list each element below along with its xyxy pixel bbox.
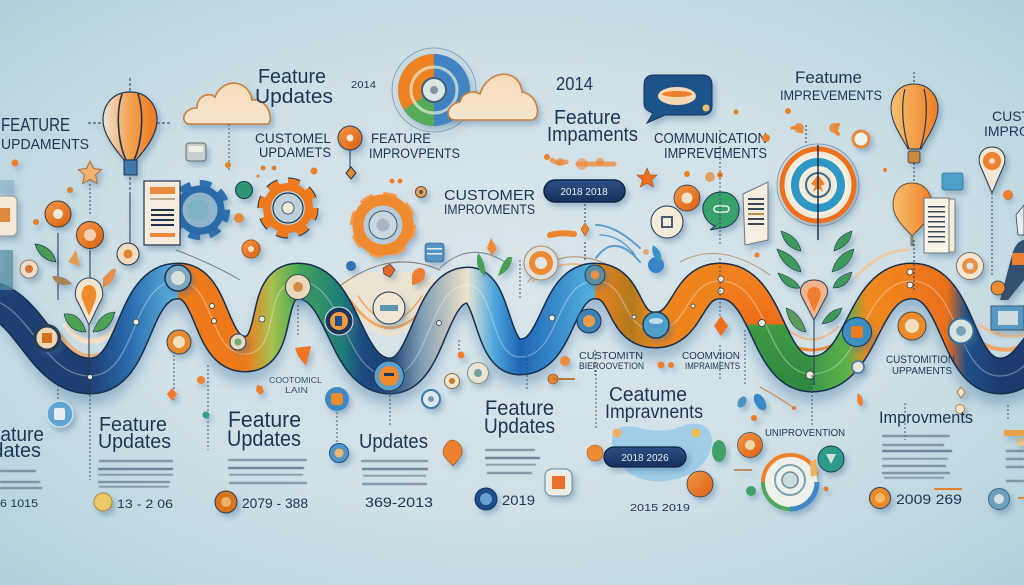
heading: feature impaments <box>547 107 638 146</box>
body text: feature updates two <box>228 459 307 484</box>
node: descending <box>948 318 974 344</box>
heading: feature updates top <box>255 66 333 108</box>
chart marker: small document device <box>186 143 206 161</box>
heading: customel updamets: CUSTOMEL <box>255 130 331 146</box>
heading: updates: Updates <box>359 431 428 453</box>
node: orange trough <box>230 334 246 350</box>
wave segment: orange peak <box>655 281 720 330</box>
timeline wave <box>0 281 1024 388</box>
target: lower <box>763 455 817 509</box>
node: peak <box>585 265 605 285</box>
balloon: right <box>891 72 938 290</box>
year marker: three: 369-2013 <box>365 494 433 510</box>
heading: ceatume impravnents: Ceatume <box>609 384 687 406</box>
heading: feature updates one <box>98 414 171 453</box>
small scatter dots top <box>225 108 1013 258</box>
caption: coomviion: COOMVIION <box>682 351 740 362</box>
heading: feature updates top: Feature <box>258 66 326 88</box>
year: far left: 6 1015 <box>0 498 38 510</box>
label: 2014 large: 2014 <box>556 74 593 94</box>
icons: central top cluster <box>234 182 512 324</box>
label: 2014 small: 2014 <box>351 80 376 91</box>
heading: feature improvpents <box>369 130 460 161</box>
wave segment: green <box>245 281 298 354</box>
icon: square badge <box>545 469 572 496</box>
caption: customition: CUSTOMITION <box>886 354 955 366</box>
pill: date label lower: 2018 2026 <box>621 453 669 464</box>
pin: orange sprout <box>786 280 842 385</box>
pill: date label top <box>544 180 625 262</box>
heading: feature updates two <box>227 407 301 451</box>
wave segment: green to orange <box>812 281 912 374</box>
speech bubble: blue <box>644 75 712 123</box>
node: orange small <box>167 330 191 354</box>
heading: ceatume impravnents <box>605 384 703 423</box>
node: orange lower <box>898 312 926 340</box>
heading: feature updates two: Updates <box>227 426 301 451</box>
heading: feature improvpents: IMPROVPENTS <box>369 145 460 161</box>
heading: communication improvements: COMMUNICATION <box>654 130 767 147</box>
heading: feature updates one: Updates <box>98 431 171 453</box>
caption: customition: UPPAMENTS <box>892 366 952 377</box>
heading: improvments: Improvments <box>879 408 973 427</box>
caption: coomviion <box>682 351 740 371</box>
heading: feature updates centre: Updates <box>484 415 555 438</box>
cloud: right <box>448 74 537 120</box>
year marker: four: 2019 <box>502 492 535 508</box>
heading: left feature: UPDAMENTS <box>1 136 89 153</box>
vertical connector lines <box>58 130 1008 480</box>
icons: below wave left <box>47 346 570 466</box>
wave segment: orange <box>178 281 245 354</box>
node: left trough <box>33 324 61 352</box>
heading: communication improvements <box>654 130 767 162</box>
year marker: two <box>215 491 308 513</box>
heading: featume improvements: Featume <box>795 68 862 87</box>
body text: far left <box>0 470 42 489</box>
wave segment: navy start <box>0 298 90 376</box>
wave segment: blue rising two <box>520 281 595 357</box>
heading: customer improvments: IMPROVMENTS <box>444 201 535 217</box>
heading: customel updamets: UPDAMETS <box>259 144 331 160</box>
wave segment: pale peak <box>390 285 468 376</box>
text blocks: body lines <box>0 435 1024 489</box>
pin: leaf sprout left <box>64 278 115 395</box>
blue blob with pill: lower <box>587 423 726 497</box>
node: navy trough <box>374 361 404 391</box>
wave segment: amber <box>595 281 655 330</box>
icons: below wave centre <box>548 316 1024 472</box>
year marker: one <box>94 493 173 511</box>
heading: feature updates two: Feature <box>228 407 301 432</box>
heading: customer improvments <box>444 187 535 217</box>
heading: communication improvements: IMPREVEMENTS <box>664 145 767 162</box>
target: large <box>777 125 869 240</box>
pin: orange top <box>338 126 362 179</box>
node: blue peak <box>165 265 191 291</box>
body text: feature centre <box>485 449 540 474</box>
body text: far right <box>1006 450 1024 482</box>
caption: cootomicl: LAIN <box>285 386 308 395</box>
caption: customitn: BIEROOVETION <box>579 361 644 371</box>
caption: customitn: CUSTOMITN <box>579 351 643 362</box>
heading: feature impaments: Impaments <box>547 124 638 146</box>
pill: date label top: 2018 2018 <box>560 187 608 198</box>
heading: clipped right <box>984 108 1024 139</box>
leaves: right sprout <box>777 231 854 288</box>
balloon: left <box>88 78 172 240</box>
heading: feature updates centre <box>484 397 555 438</box>
small path beads <box>88 269 913 380</box>
heading: feature improvpents: FEATURE <box>371 130 431 146</box>
heading: featume improvements: IMPREVEMENTS <box>780 87 882 103</box>
concentric chart: top <box>392 48 476 132</box>
node: amber trough <box>643 312 669 338</box>
caption: customitn <box>579 351 644 371</box>
heading: left feature: FEATURE <box>1 115 70 135</box>
node: green peak <box>286 274 310 300</box>
heading: feature updates top: Updates <box>255 86 333 108</box>
icons: right edge cluster <box>942 147 1024 330</box>
wave segment: blue descent <box>468 285 520 357</box>
heading: feature impaments: Feature <box>554 107 621 129</box>
year marker: one: 13 - 2 06 <box>117 497 173 511</box>
body text: feature updates one <box>98 460 173 488</box>
heading: feature updates centre: Feature <box>485 397 554 420</box>
heading: customel updamets <box>255 130 331 160</box>
leaves and rings: centre <box>524 168 768 280</box>
icons: left column <box>20 187 139 320</box>
year marker: five: 2009 269 <box>896 491 962 507</box>
orange dashes <box>550 125 838 235</box>
caption: cootomicl: COOTOMICL <box>269 376 323 385</box>
node: green corner <box>842 318 872 346</box>
star: tan <box>78 161 102 215</box>
cloud: left <box>184 83 270 170</box>
heading: clipped lower left <box>0 424 44 462</box>
heading: customer improvments: CUSTOMER <box>444 187 535 204</box>
small icons: lower right <box>734 430 1024 496</box>
wave segment: orange to green <box>720 281 812 374</box>
heading: feature updates one: Feature <box>99 414 167 436</box>
wave nodes <box>33 265 974 391</box>
gear: orange middle <box>263 183 313 233</box>
wave segment: blue rising <box>90 281 178 376</box>
left edge collage <box>0 160 18 290</box>
wave segment: orange to navy <box>912 281 1024 376</box>
caption: cootomicl <box>269 376 323 395</box>
heading: featume improvements <box>780 68 882 103</box>
year marker: four <box>475 488 535 510</box>
node: blue rising <box>577 309 601 333</box>
heading: left feature <box>1 115 89 153</box>
body text: updates <box>361 460 428 485</box>
balloon: pear with document <box>893 183 955 253</box>
caption: coomviion: IMPRAIMENTS <box>685 361 740 371</box>
gear: blue with document <box>144 181 223 245</box>
node: navy upper <box>325 307 353 335</box>
year: faint: 2015 2019 <box>630 503 691 514</box>
year marker: five <box>870 488 962 508</box>
wave segment: navy trough <box>298 281 390 376</box>
caption: uniprovention: UNIPROVENTION <box>765 428 845 439</box>
year marker: six <box>988 488 1024 510</box>
decorative arcs beneath and above the wave <box>60 225 1024 356</box>
gear: orange right <box>356 198 410 252</box>
year marker: two: 2079 - 388 <box>242 495 308 511</box>
heading: ceatume impravnents: Impravnents <box>605 402 703 423</box>
caption: customition <box>886 354 955 377</box>
body text: improvments <box>882 435 952 478</box>
